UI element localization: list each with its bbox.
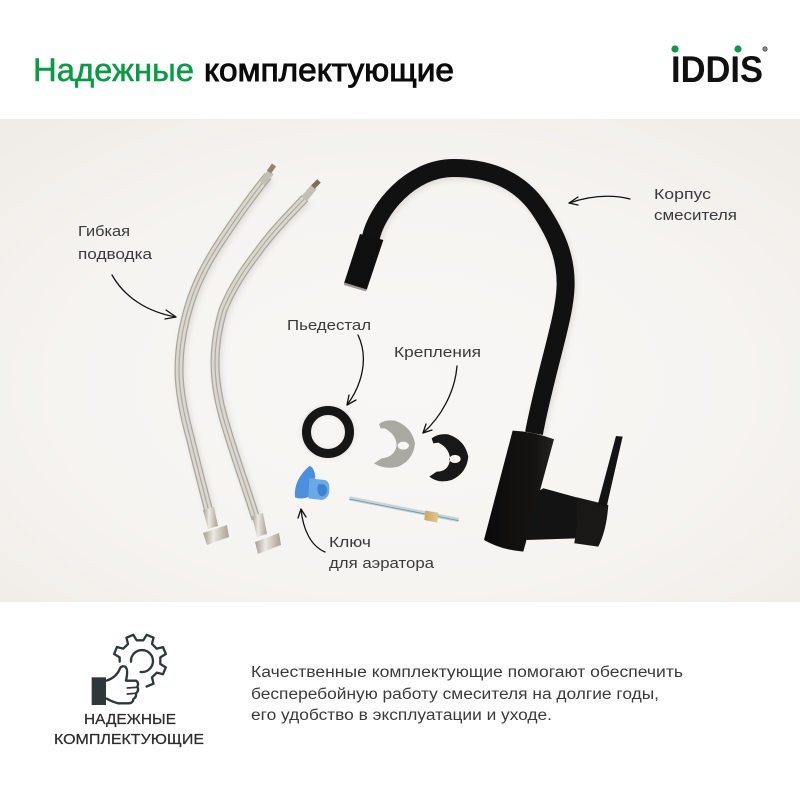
callout arrow: hose xyxy=(112,275,176,319)
label: aerator key: Ключ xyxy=(329,534,371,551)
hose: left flexible connector xyxy=(179,165,274,545)
icon: gear and thumbs up xyxy=(92,635,166,705)
callout arrow: faucet body xyxy=(569,196,630,205)
callout arrow: pedestal xyxy=(347,335,363,405)
description text: бесперебойную работу смесителя на долгие годы, xyxy=(251,686,659,703)
label: faucet body: смесителя xyxy=(654,207,737,224)
mounting plates xyxy=(374,420,468,481)
icon caption: КОМПЛЕКТУЮЩИЕ xyxy=(54,731,204,748)
label: mounting plates: Крепления xyxy=(394,344,481,361)
description text: его удобство в эксплуатации и уходе. xyxy=(251,707,552,724)
hose: right flexible connector xyxy=(215,181,319,554)
label: hose: Гибкая xyxy=(78,223,130,240)
label: hose xyxy=(78,223,153,263)
aerator key xyxy=(295,466,329,500)
description text xyxy=(251,664,683,724)
label: aerator key xyxy=(329,534,435,572)
threaded rod with brass nut xyxy=(349,498,459,523)
shadows under the parts xyxy=(181,171,568,521)
icon caption xyxy=(54,711,204,748)
icon caption: НАДЕЖНЫЕ xyxy=(84,711,176,728)
label: aerator key: для аэратора xyxy=(329,555,435,572)
title: комплектующие xyxy=(204,52,454,88)
logo: IDDIS: IDDIS xyxy=(671,49,763,90)
pedestal ring xyxy=(306,410,350,454)
faucet body xyxy=(344,168,623,552)
label: faucet body: Корпус xyxy=(654,186,712,203)
label: faucet body xyxy=(654,186,737,224)
panel: product photo xyxy=(0,119,800,602)
label: hose: подводка xyxy=(78,246,153,263)
callout arrow: aerator key xyxy=(298,509,325,552)
label: pedestal: Пьедестал xyxy=(287,317,371,334)
callout arrow: mounting plates xyxy=(423,366,457,433)
description text: Качественные комплектующие помогают обеспечить xyxy=(251,664,683,681)
title: Надежные xyxy=(33,52,194,88)
title xyxy=(33,52,454,88)
